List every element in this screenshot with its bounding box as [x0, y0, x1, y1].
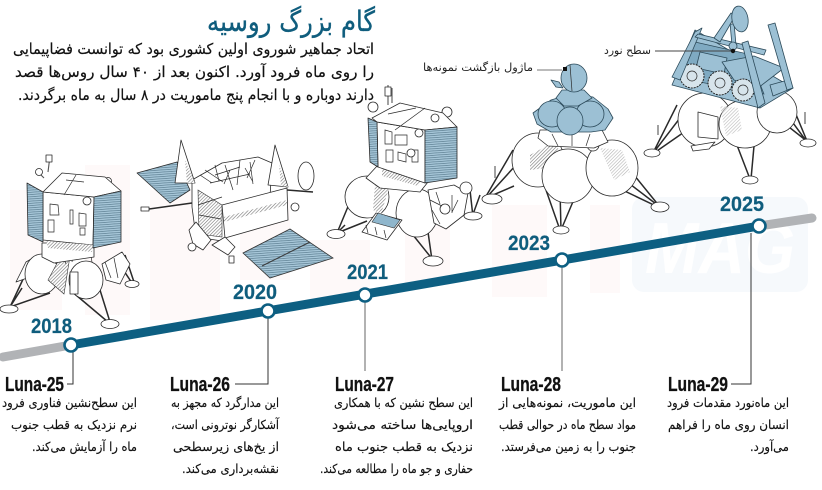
text block: Luna-28: این ماموریت، نمونه‌هایی از: [498, 395, 636, 411]
year labels: 2023: [508, 232, 550, 255]
text block: Luna-26: از یخ‌های زیرسطحی: [173, 439, 279, 455]
leader lines: [67, 233, 751, 384]
text block: Luna-25: نرم نزدیک به قطب جنوب: [11, 417, 137, 433]
lander: Luna-29: [644, 5, 816, 184]
payload platform: [672, 30, 793, 108]
intro text: را روی ماه فرود آورد. اکنون بعد از ۴۰ سال روس‌ها قصد: [15, 63, 374, 81]
text block: Luna-29: این ماه‌نورد مقدمات فرود: [667, 395, 789, 411]
text block: Luna-26: آشکارگر نوترونی است،: [171, 417, 279, 433]
text block: Luna-29: Luna-29: [668, 374, 728, 396]
lander: Luna-27: [327, 85, 482, 266]
blue module: [533, 94, 613, 132]
text block: Luna-29: [667, 374, 789, 455]
text block: Luna-25: این سطح‌نشین فناوری فرود: [2, 395, 137, 411]
background watermark: MAG: [645, 209, 795, 289]
year labels: 2020: [233, 281, 277, 304]
text block: Luna-29: می‌آورد.: [750, 439, 789, 455]
text block: Luna-28: جنوب را به زمین می‌فرستد.: [501, 439, 636, 455]
text block: Luna-27: Luna-27: [335, 374, 394, 396]
callout: sample return module: ماژول بازگشت نمونه‌ها: [423, 61, 533, 74]
text block: Luna-25: ماه را آزمایش می‌کند.: [32, 439, 137, 455]
intro text: اتحاد جماهیر شوروی اولین کشوری بود که توانست فضاپیمایی: [13, 40, 374, 59]
year labels: [31, 193, 764, 338]
text block: Luna-27: نزدیک به قطب جنوب ماه: [335, 439, 473, 455]
text block: Luna-26: [170, 374, 279, 477]
text block: Luna-27: حفاری و جو ماه را مطالعه می‌کند.: [320, 461, 473, 477]
intro text: دارند دوباره و با انجام پنج ماموریت در ۸ سال به ماه برگردند.: [18, 86, 374, 105]
background watermark: [10, 165, 808, 320]
intro text: [13, 40, 374, 105]
text block: Luna-27: [320, 374, 473, 477]
text block: Luna-27: این سطح نشین که با همکاری: [334, 395, 473, 411]
timeline: [3, 218, 812, 357]
body: [43, 192, 94, 245]
callout: rover: [604, 44, 735, 57]
text block: Luna-26: Luna-26: [170, 374, 230, 396]
text block: Luna-26: این مدارگرد که مجهز به: [171, 395, 279, 411]
text block: Luna-25: [2, 374, 137, 455]
text block: Luna-27: اروپایی‌ها ساخته می‌شود: [332, 417, 473, 433]
text block: Luna-26: نقشه‌برداری می‌کند.: [182, 461, 279, 477]
year labels: 2021: [347, 261, 388, 284]
lander: Luna-25: [0, 155, 139, 328]
text block: Luna-25: Luna-25: [5, 374, 64, 396]
legs: [10, 255, 134, 322]
legs: [485, 150, 660, 230]
text block: Luna-28: مواد سطح ماه در حوالی قطب: [499, 417, 636, 433]
lander: Luna-26: [137, 140, 333, 278]
year labels: 2018: [31, 315, 72, 338]
callout: rover: سطح نورد: [604, 44, 651, 57]
text block: Luna-28: [498, 374, 636, 455]
text block: Luna-29: انسان روی ماه را فراهم: [668, 417, 789, 433]
legs: [337, 190, 480, 260]
legs: [654, 100, 808, 179]
text block: Luna-28: Luna-28: [501, 374, 561, 396]
body: [377, 122, 425, 183]
year labels: 2025: [720, 193, 764, 216]
lander: Luna-28: [482, 64, 669, 234]
title: گام بزرگ روسیه: [207, 5, 376, 38]
milestone nodes: [64, 220, 766, 352]
